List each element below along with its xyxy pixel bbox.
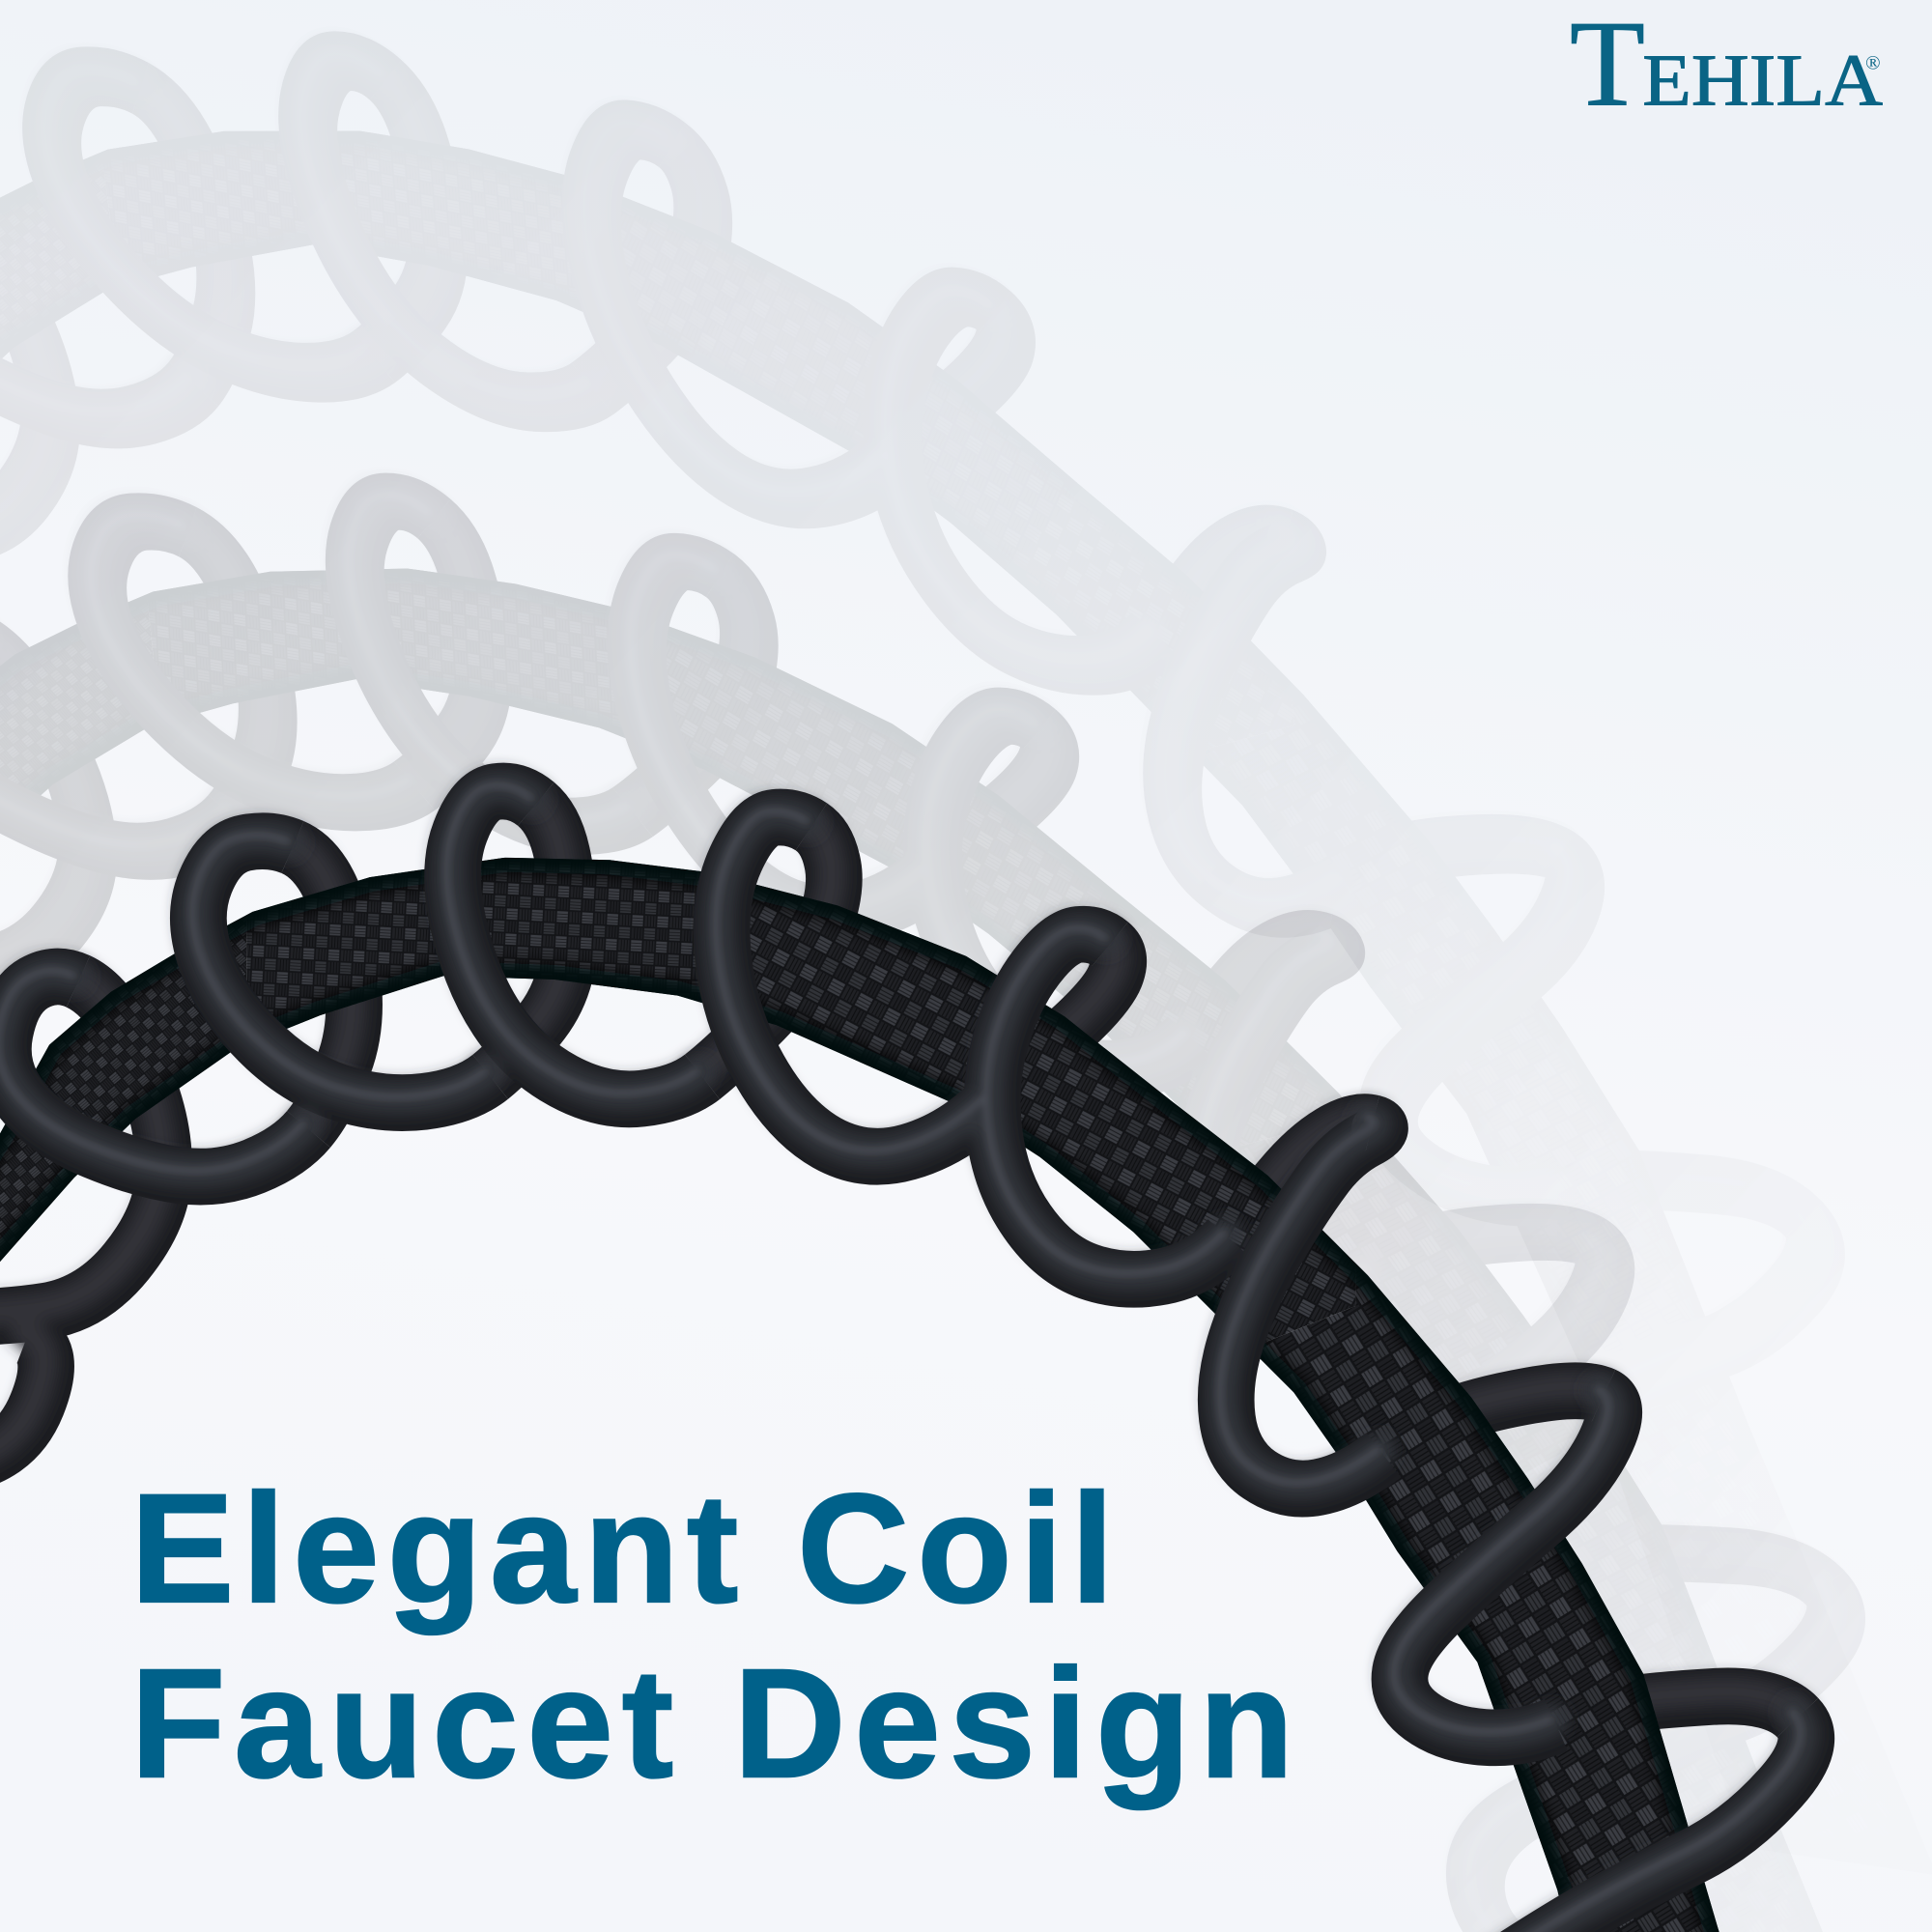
brand logo: Tehila: EHILA	[1642, 39, 1883, 121]
faded far ghost of coil hose	[0, 31, 1618, 1191]
brand logo: Tehila	[1570, 0, 1883, 131]
title: Elegant Coil Faucet Design: Elegant Coil	[130, 1463, 1114, 1635]
title: Elegant Coil Faucet Design	[130, 1463, 1293, 1810]
black coiled braided faucet hose	[0, 739, 1932, 1932]
brand logo: Tehila: ®	[1865, 52, 1881, 73]
title: Elegant Coil Faucet Design: Faucet Design	[130, 1637, 1293, 1810]
